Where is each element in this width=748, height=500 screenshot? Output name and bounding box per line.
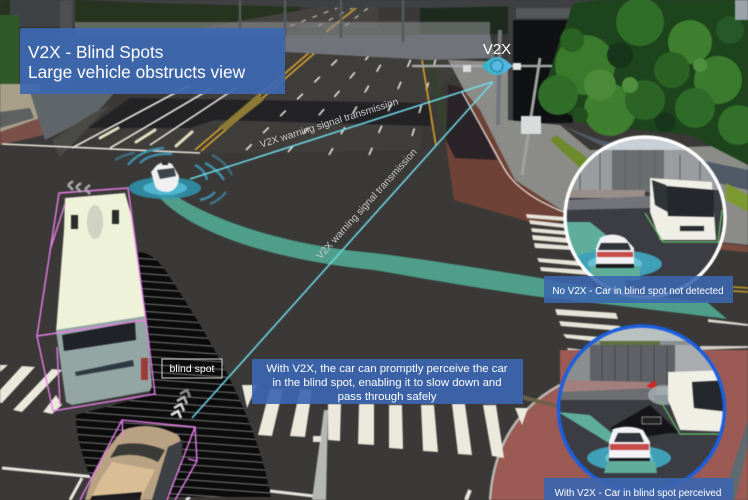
title box: V2X - Blind Spots	[28, 42, 164, 62]
hidden tan car with pink bounding box	[80, 420, 197, 500]
right crosswalk	[526, 214, 622, 355]
tiny blind area tag	[642, 417, 661, 424]
ghost car	[648, 384, 670, 406]
bus with pink bounding box	[37, 188, 155, 411]
background: buildings and trees at top	[0, 0, 300, 157]
far road with lane markings	[2, 3, 480, 155]
white car in inset	[609, 427, 650, 461]
trees on right	[538, 0, 748, 165]
lower-right brick plaza	[490, 287, 748, 500]
inset: with V2X	[555, 325, 730, 492]
right building	[420, 0, 578, 123]
blind spot label	[162, 359, 222, 378]
white bus in inset	[645, 178, 722, 242]
signal label upper: V2X warning signal transmission	[259, 97, 400, 151]
caption: with V2X	[544, 478, 733, 500]
left crosswalk	[0, 365, 62, 414]
title box	[20, 28, 285, 94]
caption: no V2X	[544, 276, 733, 303]
connected car with signal rings	[115, 148, 232, 204]
callout: with V2X explanation: in the blind spot, enabling it to slow down and	[272, 377, 502, 389]
sidewalk right	[448, 60, 748, 245]
chevron arrows in blind spot	[171, 390, 190, 418]
bottom road lines	[2, 468, 470, 500]
callout: with V2X explanation: pass through safely	[338, 391, 437, 403]
V2X signal lines	[190, 82, 493, 418]
title box: Large vehicle obstructs view	[28, 62, 246, 82]
signal label lower: V2X warning signal transmission	[315, 147, 420, 262]
white bus in inset	[660, 370, 730, 434]
blind spot label: blind spot	[170, 363, 215, 375]
hedge	[550, 135, 590, 168]
middle crosswalk	[242, 385, 528, 458]
V2X roadside pole	[412, 30, 552, 175]
pedestrian bridge	[75, 0, 600, 60]
callout: with V2X explanation	[252, 359, 523, 404]
caption: with V2X: With V2X - Car in blind spot perceived	[555, 488, 721, 499]
V2X eye icon	[482, 57, 512, 75]
caption: no V2X: No V2X - Car in blind spot not detected	[552, 286, 724, 297]
blind spot hatched area	[76, 252, 271, 497]
railing at bottom center	[312, 410, 328, 500]
teal planned path of connected car	[150, 176, 727, 319]
callout: with V2X explanation: With V2X, the car can promptly perceive the car	[266, 363, 508, 375]
V2X label: V2X	[483, 41, 511, 58]
chevron arrows above bus	[68, 181, 90, 194]
white car in inset	[596, 234, 634, 268]
red bike lane	[446, 84, 566, 222]
inset: no V2X	[560, 130, 730, 300]
red warning triangle	[646, 380, 656, 390]
